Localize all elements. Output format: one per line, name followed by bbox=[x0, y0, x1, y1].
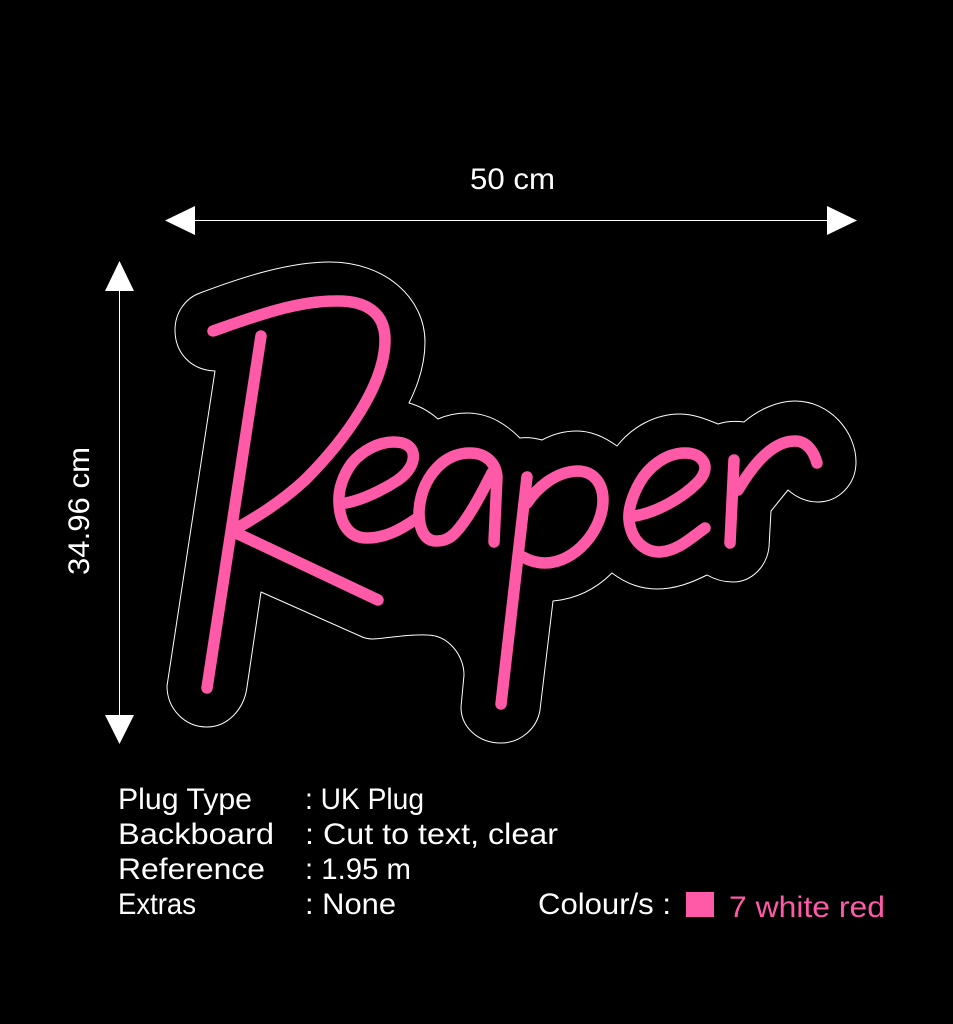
width dimension: 50 cm bbox=[165, 163, 857, 235]
backboard cut outline bbox=[167, 262, 856, 743]
letter e bbox=[629, 453, 705, 552]
colour swatch bbox=[686, 892, 714, 917]
height dimension: 34.96 cm: 34.96 cm bbox=[63, 447, 96, 575]
letter e bbox=[339, 442, 416, 538]
specification list: : None bbox=[305, 888, 396, 921]
specification list: Reference bbox=[118, 853, 265, 886]
specification list: : 1.95 m bbox=[305, 853, 411, 886]
specification list bbox=[118, 783, 558, 921]
specification list: : UK Plug bbox=[305, 783, 424, 816]
letter R bbox=[207, 301, 385, 688]
letter p bbox=[501, 471, 603, 704]
width dimension: 50 cm: 50 cm bbox=[470, 163, 555, 196]
height dimension: 34.96 cm bbox=[63, 261, 134, 744]
colour legend: 7 white red bbox=[729, 891, 885, 924]
letter a bbox=[419, 453, 497, 542]
specification list: Extras bbox=[118, 888, 196, 921]
colour legend bbox=[538, 888, 885, 924]
specification list: : Cut to text, clear bbox=[305, 818, 558, 851]
specification list: Plug Type bbox=[118, 783, 252, 816]
colour legend: Colour/s : bbox=[538, 888, 671, 921]
neon lettering: Reaper bbox=[207, 301, 817, 704]
letter r bbox=[730, 441, 817, 543]
specification list: Backboard bbox=[118, 818, 274, 851]
